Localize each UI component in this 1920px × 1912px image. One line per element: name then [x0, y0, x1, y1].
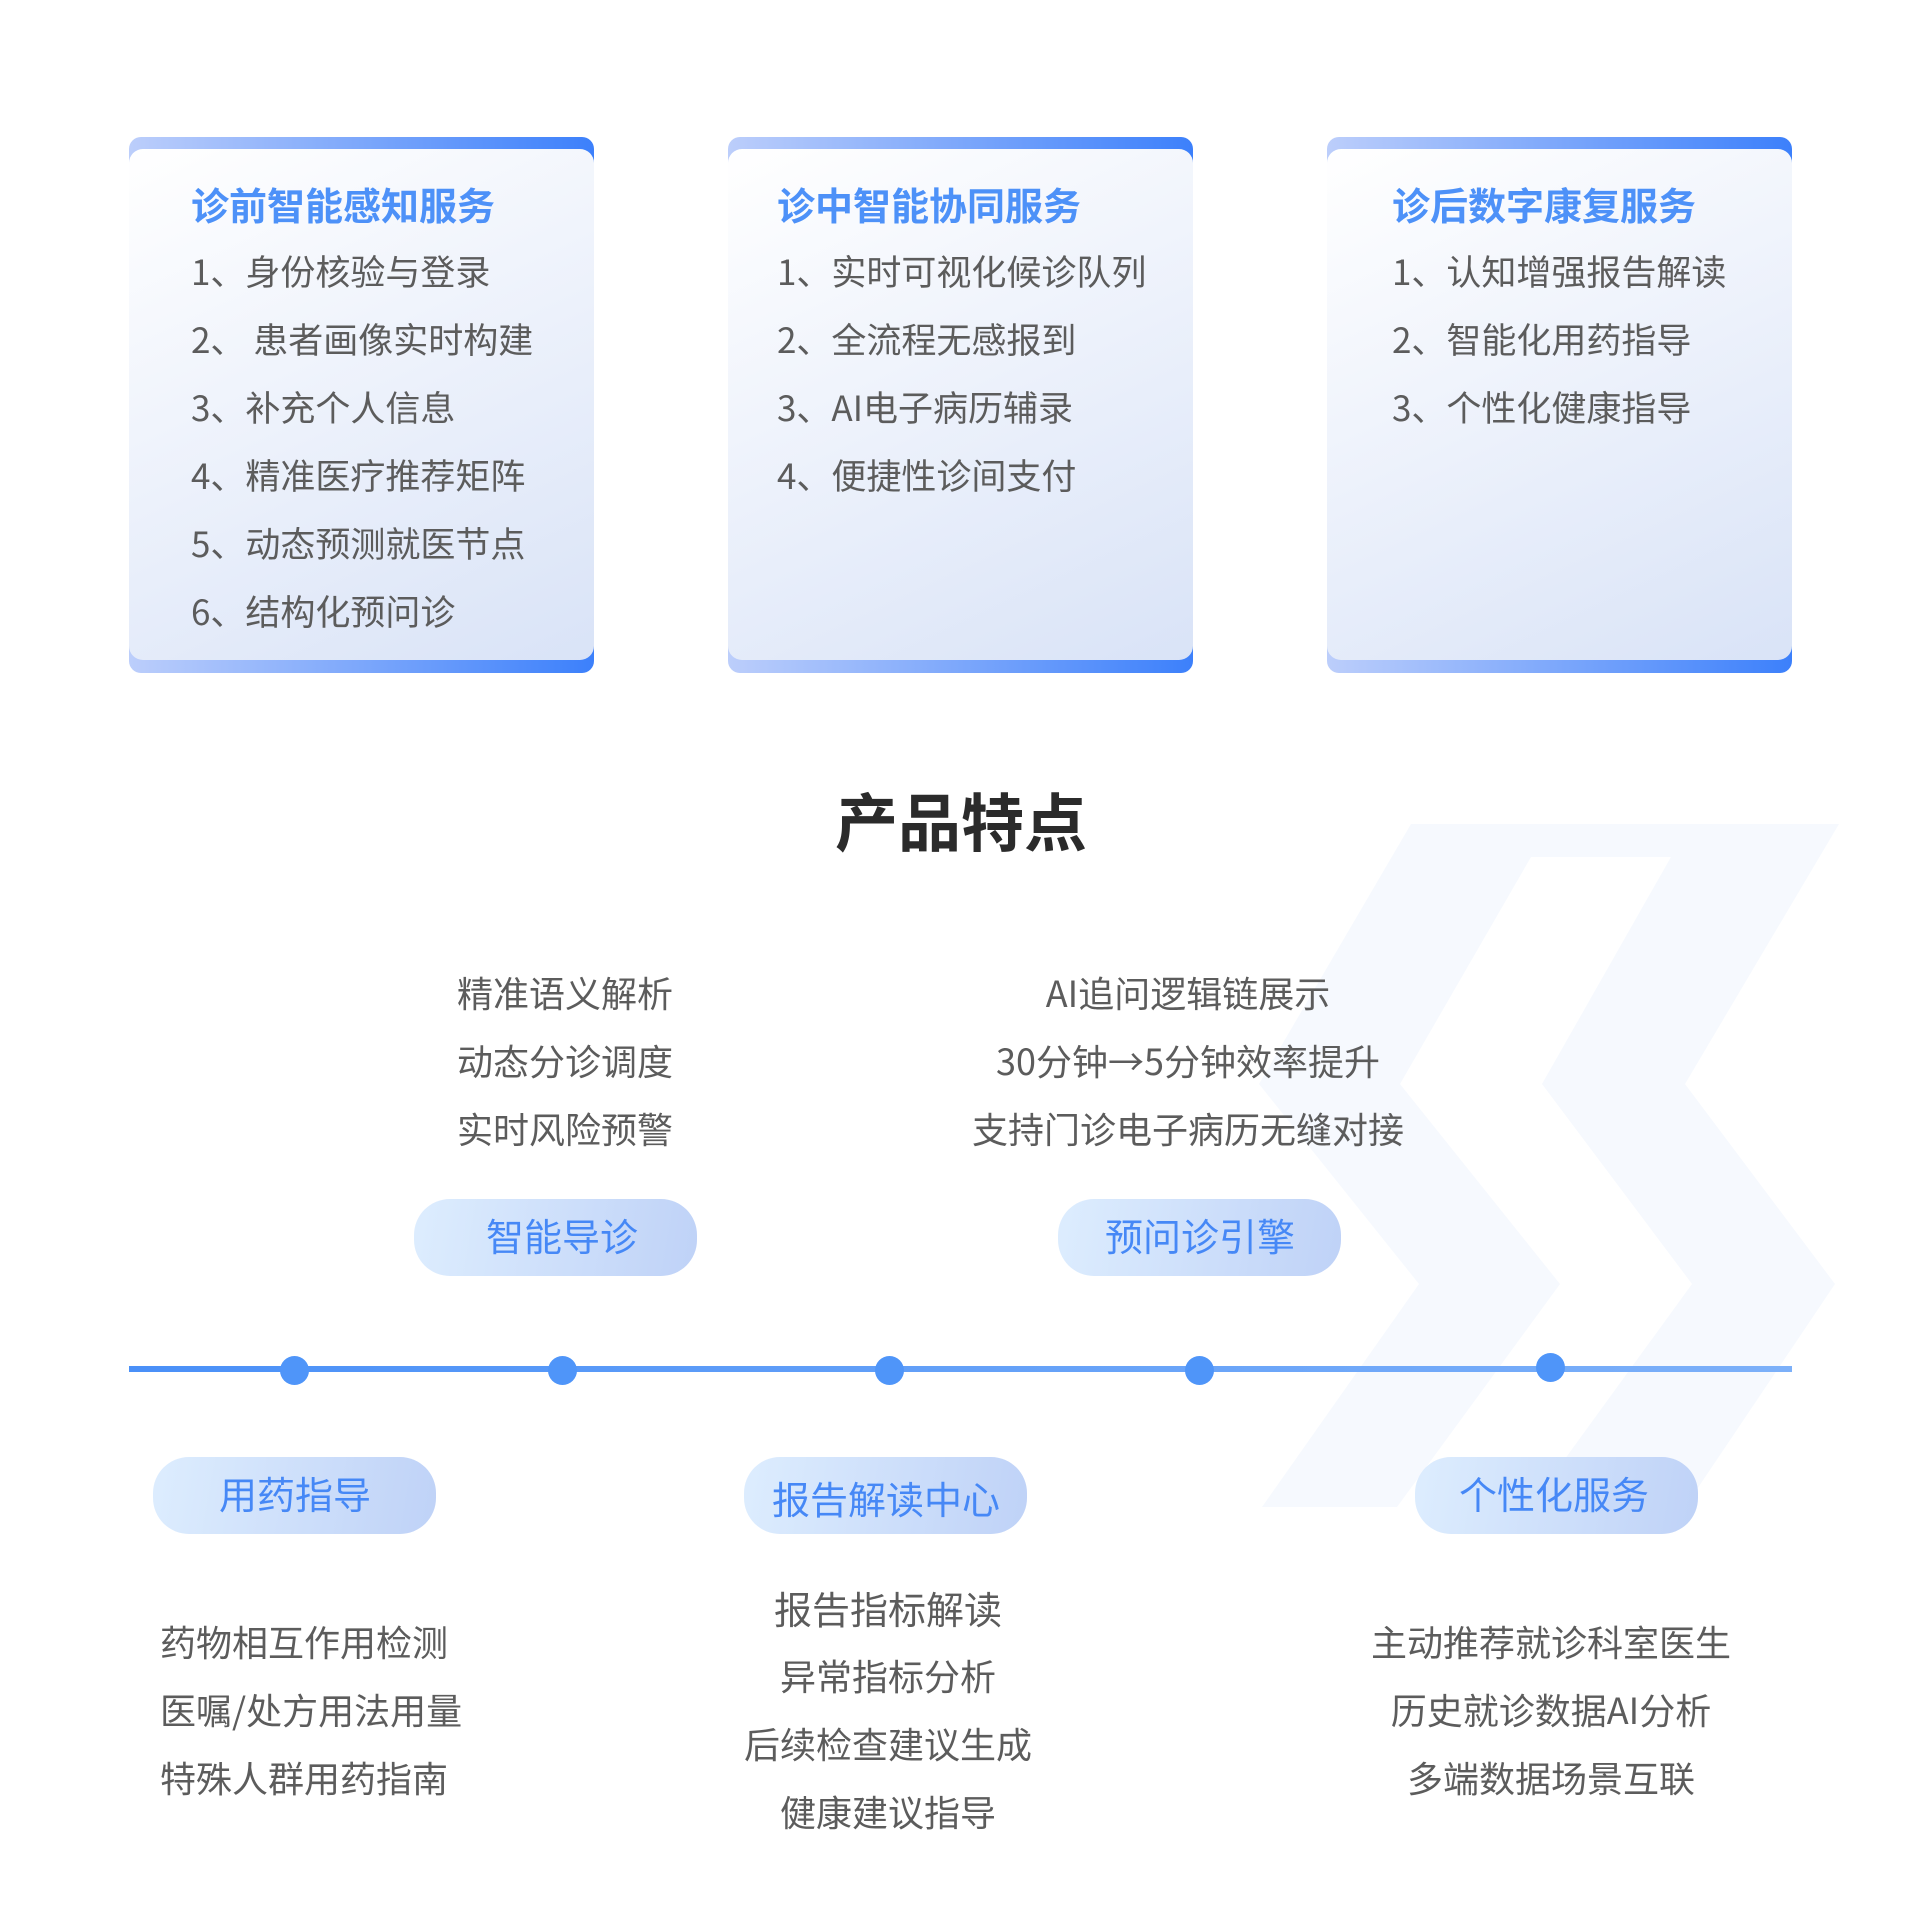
list item 1: 1、身份核验与登录 — [191, 245, 490, 296]
list item 3: 3、补充个人信息 — [191, 381, 455, 432]
card heading: in-visit: 诊中智能协同服务 — [777, 176, 1081, 231]
text block: smart triage features — [457, 966, 673, 1154]
timeline node 4 — [1185, 1356, 1214, 1385]
pill: smart triage — [414, 1199, 697, 1276]
text block: report center features: 报告指标解读 — [774, 1580, 1002, 1635]
text block: personalized service features: 主动推荐就诊科室医生 — [1371, 1615, 1731, 1667]
card heading: pre-visit: 诊前智能感知服务 — [191, 176, 495, 231]
list item 5: 5、动态预测就医节点 — [191, 517, 525, 568]
list item 2: 2、 患者画像实时构建 — [191, 313, 533, 364]
pill: pre-consultation engine — [1058, 1199, 1341, 1276]
text block: personalized service features: 多端数据场景互联 — [1407, 1751, 1695, 1803]
list item 6: 6、结构化预问诊 — [191, 585, 455, 636]
list item 1: 1、认知增强报告解读 — [1392, 245, 1726, 296]
pill: report interpretation center: 报告解读中心 — [772, 1470, 1000, 1525]
pill: medication guidance: 用药指导 — [219, 1465, 371, 1520]
panel: pre-visit service card — [129, 137, 594, 673]
text block: pre-consultation engine features: AI追问逻辑链展示 — [1046, 966, 1330, 1018]
text block: report center features: 异常指标分析 — [780, 1649, 996, 1701]
timeline — [129, 1353, 1792, 1385]
timeline node 2 — [548, 1356, 577, 1385]
text block: medication guidance features — [160, 1615, 462, 1803]
text block: smart triage features: 精准语义解析 — [457, 966, 673, 1018]
pill: personalized service: 个性化服务 — [1459, 1465, 1649, 1520]
text block: smart triage features: 实时风险预警 — [457, 1102, 673, 1154]
list item 4: 4、便捷性诊间支付 — [777, 449, 1076, 500]
text block: report center features: 后续检查建议生成 — [744, 1717, 1032, 1769]
list item 1: 1、实时可视化候诊队列 — [777, 245, 1146, 296]
pill: pre-consultation engine: 预问诊引擎 — [1105, 1207, 1295, 1262]
text block: report center features — [744, 1580, 1032, 1837]
list item 2: 2、全流程无感报到 — [777, 313, 1076, 364]
timeline node 5 — [1536, 1353, 1565, 1382]
list item 2: 2、智能化用药指导 — [1392, 313, 1691, 364]
list item 4: 4、精准医疗推荐矩阵 — [191, 449, 525, 500]
pill: smart triage: 智能导诊 — [486, 1207, 638, 1262]
text block: personalized service features: 历史就诊数据AI分析 — [1391, 1683, 1711, 1735]
panel: post-visit service card — [1327, 137, 1792, 673]
pill: personalized service — [1415, 1457, 1698, 1534]
text block: smart triage features: 动态分诊调度 — [457, 1034, 673, 1086]
card heading: post-visit: 诊后数字康复服务 — [1392, 176, 1696, 231]
timeline node 1 — [280, 1356, 309, 1385]
text block: pre-consultation engine features: 30分钟→5分钟效率提升 — [996, 1034, 1380, 1086]
list item 3: 3、个性化健康指导 — [1392, 381, 1691, 432]
text block: medication guidance features: 医嘱/处方用法用量 — [160, 1683, 462, 1735]
pill: report interpretation center — [744, 1457, 1027, 1534]
timeline node 3 — [875, 1356, 904, 1385]
text block: medication guidance features: 药物相互作用检测 — [160, 1615, 448, 1667]
pill: medication guidance — [153, 1457, 436, 1534]
text block: pre-consultation engine features — [972, 966, 1404, 1154]
section title: 产品特点 — [835, 774, 1087, 865]
text block: personalized service features — [1371, 1615, 1731, 1803]
panel: in-visit service card — [728, 137, 1193, 673]
text block: pre-consultation engine features: 支持门诊电子病历无缝对接 — [972, 1102, 1404, 1154]
list item 3: 3、AI电子病历辅录 — [777, 381, 1073, 432]
text block: medication guidance features: 特殊人群用药指南 — [160, 1751, 448, 1803]
text block: report center features: 健康建议指导 — [780, 1785, 996, 1837]
